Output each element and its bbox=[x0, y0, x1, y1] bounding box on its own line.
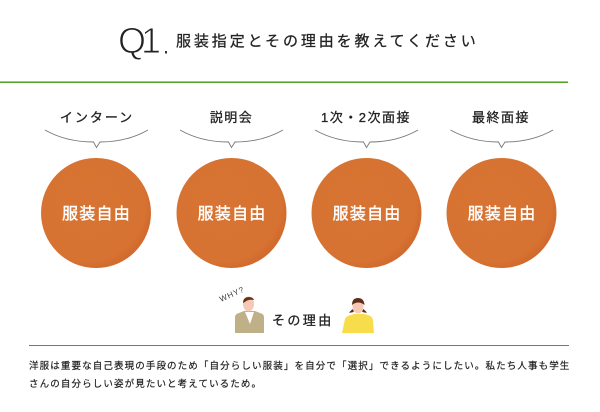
green divider bbox=[0, 82, 568, 83]
speech bracket bbox=[315, 130, 418, 148]
speech bracket bbox=[180, 130, 283, 148]
circle text: 服装自由 bbox=[468, 205, 536, 223]
icon: woman in yellow top bbox=[342, 298, 374, 333]
speech bracket bbox=[45, 130, 148, 148]
body text: さんの自分らしい姿が見たいと考えているため。 bbox=[29, 378, 262, 390]
circle bbox=[446, 158, 556, 268]
body text bbox=[29, 360, 570, 390]
label: 1次・2次面接: 1次・2次面接 bbox=[321, 110, 411, 125]
label: 最終面接: 最終面接 bbox=[472, 110, 530, 125]
title: Q bbox=[118, 20, 146, 61]
title bbox=[118, 20, 479, 61]
WHY label: WHY? bbox=[218, 285, 246, 304]
column: 説明会 bbox=[176, 110, 286, 268]
label: 説明会: 説明会 bbox=[210, 110, 253, 125]
circle text: 服装自由 bbox=[333, 205, 401, 223]
thin divider bbox=[29, 345, 569, 346]
column: 1次・2次面接 bbox=[312, 110, 422, 268]
title: 1 bbox=[141, 20, 161, 61]
circle bbox=[41, 158, 151, 268]
circle text: 服装自由 bbox=[198, 205, 266, 223]
speech bracket bbox=[450, 130, 553, 148]
circle bbox=[312, 158, 422, 268]
body text: 洋服は重要な自己表現の手段のため「自分らしい服装」を自分で「選択」できるようにしたい。私たち人事も学生 bbox=[29, 360, 570, 372]
title: 服装指定とその理由を教えてください bbox=[176, 33, 479, 50]
icon: man in beige jacket bbox=[235, 296, 264, 333]
heading: reason: その理由 bbox=[272, 313, 334, 328]
column: インターン bbox=[41, 110, 151, 268]
label: インターン: インターン bbox=[60, 110, 134, 125]
column: 最終面接 bbox=[446, 110, 556, 268]
circle text: 服装自由 bbox=[62, 205, 131, 223]
circle bbox=[176, 158, 286, 268]
